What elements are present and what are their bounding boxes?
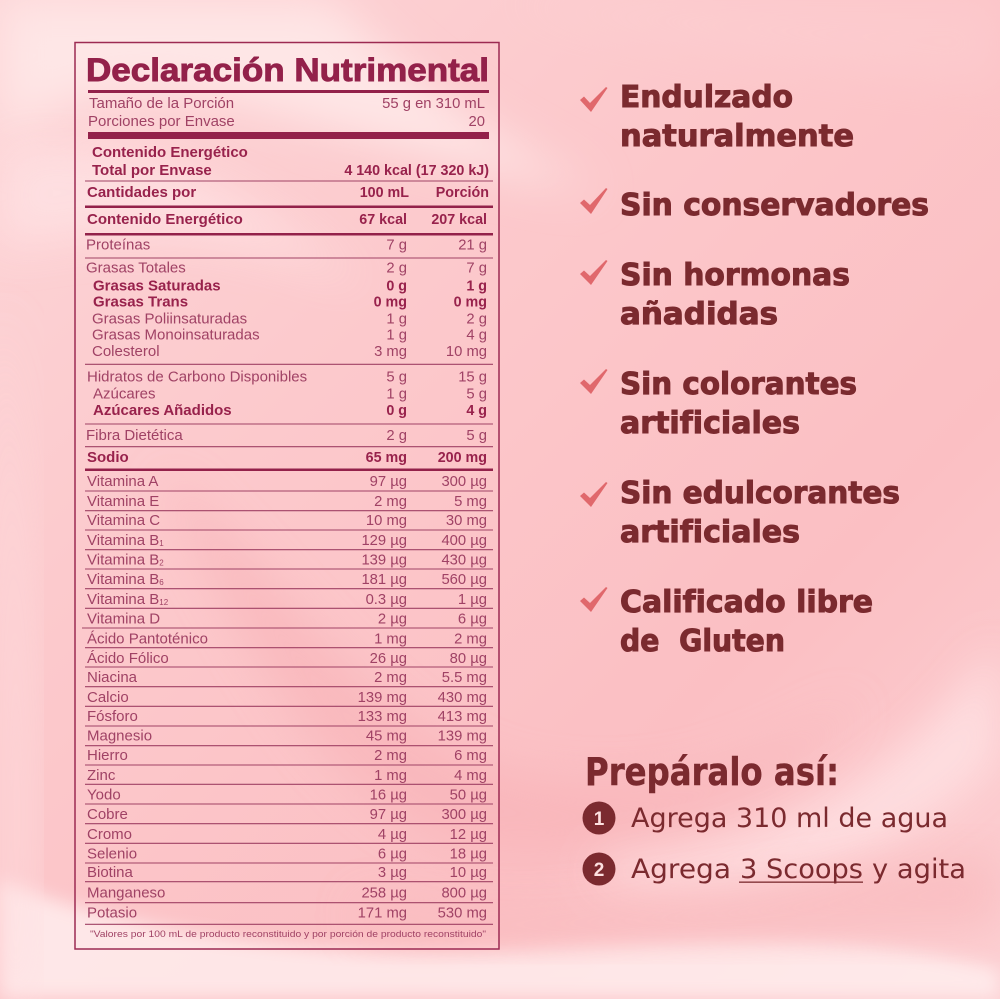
benefit: sin hormonas añadidas [580,258,850,332]
row: vitamina E: 5 mg [454,494,487,510]
header rule [88,90,489,93]
fats group [86,260,487,360]
row: ácido fólico: Ácido Fólico [87,650,169,667]
row: potasio [87,905,487,922]
energy row: 207 kcal [431,212,487,228]
benefit: sin edulcorantes artificiales: artificiales [620,515,800,550]
benefit: sin edulcorantes artificiales: Sin edulcorantes [620,476,900,511]
row: manganeso: Manganeso [87,884,165,901]
servings per container row: 20 [469,114,485,130]
row: yodo: 50 µg [450,788,487,804]
row: vitamina C: 10 mg [366,513,407,529]
row: colesterol [92,343,487,360]
row: hierro [87,747,487,764]
row: grasas poliinsaturadas: 2 g [466,311,487,327]
row: grasas trans [93,294,487,311]
icon: check [580,482,608,507]
row: niacina: 2 mg [374,670,407,686]
row: vitamina B1: 400 µg [441,533,487,549]
row: manganeso: 800 µg [441,885,487,901]
row: azúcares: Azúcares [93,385,156,402]
row: grasas monoinsaturadas [92,326,487,343]
vitamins and minerals list [82,473,493,922]
row: vitamina B6: 181 µg [361,572,407,588]
row: niacina [87,669,487,686]
preparation section [582,750,966,886]
benefit: endulzado naturalmente [580,80,854,154]
row: hidratos: Hidratos de Carbono Disponibles [87,369,307,386]
row: grasas totales: 2 g [386,261,407,277]
row: manganeso [87,884,487,901]
row: calcio: Calcio [87,689,129,706]
servings per container row: Porciones por Envase [88,113,235,130]
row: grasas monoinsaturadas: Grasas Monoinsaturadas [92,326,260,343]
row: yodo: Yodo [87,787,121,804]
row: sodio: 200 mg [438,450,487,466]
icon: number 2: 2 [594,860,604,881]
benefit: endulzado naturalmente: naturalmente [620,119,854,154]
energy row [87,211,487,228]
heading: preparation: Prepáralo así: [585,750,839,794]
icon: check [580,260,608,285]
row: potasio: 171 mg [358,906,407,922]
row: colesterol: Colesterol [92,343,160,360]
row: proteínas: 21 g [458,238,487,254]
row: hierro: 2 mg [374,748,407,764]
row: vitamina B12 [87,591,487,608]
row: zinc: 4 mg [454,768,487,784]
benefit: calificado libre de gluten: Calificado libre [620,585,873,620]
row: vitamina D: Vitamina D [87,610,160,627]
row: vitamina E: Vitamina E [87,493,159,510]
row: vitamina B12: Vitamina B [87,591,159,608]
icon: check [580,87,608,112]
row: ácido fólico: 80 µg [450,651,487,667]
row: fósforo: Fósforo [87,708,138,725]
row: selenio: Selenio [87,845,137,862]
row: hidratos [87,369,487,386]
row: cromo [87,826,487,843]
row: grasas monoinsaturadas: 4 g [466,327,487,343]
row: vitamina B6: 6 [159,578,164,587]
row: yodo: 16 µg [370,788,407,804]
row: cobre: 97 µg [370,807,407,823]
row: vitamina B6: Vitamina B [87,571,159,588]
row: grasas monoinsaturadas: 1 g [386,327,407,343]
icon: check [580,188,608,214]
row: grasas saturadas: Grasas Saturadas [93,278,221,295]
benefit: sin conservadores: Sin conservadores [620,188,929,223]
row: grasas saturadas: 0 g [386,279,407,295]
benefit: calificado libre de gluten [580,585,873,659]
row: ácido pantoténico [87,630,487,647]
step 2: 3 Scoops [740,854,863,885]
row: hidratos: 5 g [386,370,407,386]
row: vitamina B6 [87,571,487,588]
row: calcio [87,689,487,706]
benefit: endulzado naturalmente: Endulzado [620,80,793,115]
row: calcio: 430 mg [438,690,487,706]
column headers [87,184,489,201]
row: magnesio [87,728,487,745]
energy row: Contenido Energético [87,211,243,228]
row: vitamina B1: 129 µg [361,533,407,549]
row: magnesio: Magnesio [87,728,152,745]
row: grasas trans: 0 mg [374,295,407,311]
row: grasas trans: 0 mg [454,295,487,311]
benefit: sin hormonas añadidas: Sin hormonas [620,258,850,293]
serving size row [89,95,485,112]
row: fibra: 5 g [466,428,487,444]
row: hierro: 6 mg [454,748,487,764]
total energy block [92,144,489,179]
row: vitamina B6: 560 µg [441,572,487,588]
total energy block: 4 140 kcal (17 320 kJ) [344,163,489,179]
serving size row: 55 g en 310 mL [382,96,485,112]
benefit: sin colorantes artificiales [580,367,857,441]
row: vitamina B2: Vitamina B [87,552,159,569]
row: biotina: 10 µg [450,865,487,881]
row: vitamina C: Vitamina C [87,512,160,529]
row: cobre: Cobre [87,806,128,823]
row: vitamina D [87,610,487,627]
row: fósforo [87,708,487,725]
footnote: "Valores por 100 mL de producto reconstituido y por porción de producto reconstituido" [90,929,486,939]
row: vitamina B12: 1 µg [458,592,487,608]
row: vitamina B1: Vitamina B [87,532,159,549]
row: cromo: 12 µg [450,827,487,843]
row: manganeso: 258 µg [361,885,407,901]
row: cromo: Cromo [87,826,132,843]
benefit: sin colorantes artificiales: artificiales [620,406,800,441]
step 2 [582,852,966,886]
row: magnesio: 45 mg [366,729,407,745]
row: fibra [86,427,487,444]
column headers: Porción [436,185,489,201]
row: colesterol: 3 mg [374,344,407,360]
row: potasio: Potasio [87,905,137,922]
row: proteínas: 7 g [386,238,407,254]
step 1: Agrega 310 ml de agua [631,803,948,834]
row: colesterol: 10 mg [446,344,487,360]
row: grasas poliinsaturadas [92,310,487,327]
carbohydrates group [87,369,487,419]
row: vitamina A: 97 µg [370,474,407,490]
row: fibra: 2 g [386,428,407,444]
row: ácido pantoténico: 1 mg [374,631,407,647]
icon: number 1 [582,802,616,834]
row: zinc: Zinc [87,767,116,784]
row: grasas saturadas [93,278,487,295]
row: azúcares añadidos: 4 g [466,403,487,419]
row: ácido fólico [87,650,487,667]
benefit: sin hormonas añadidas: añadidas [620,297,778,332]
row: vitamina D: 2 µg [378,611,407,627]
row: vitamina B12: 0.3 µg [366,592,407,608]
row: vitamina B12: 12 [159,598,169,607]
icon: number 1: 1 [594,809,605,830]
row: azúcares: 1 g [386,386,407,402]
row: proteínas: Proteínas [86,236,150,254]
row: fósforo: 413 mg [438,709,487,725]
row: biotina [87,864,487,881]
row: vitamina B2: 430 µg [441,553,487,569]
benefit: sin edulcorantes artificiales [580,476,900,550]
row: selenio: 6 µg [378,846,407,862]
row: ácido pantoténico: Ácido Pantoténico [87,630,208,647]
row: vitamina D: 6 µg [458,611,487,627]
row: magnesio: 139 mg [438,729,487,745]
icon: check [580,587,608,612]
row: cromo: 4 µg [378,827,407,843]
row: ácido pantoténico: 2 mg [454,631,487,647]
row: biotina: 3 µg [378,865,407,881]
row: ácido fólico: 26 µg [370,651,407,667]
total energy block: Contenido Energético [92,144,248,161]
row: vitamina A: 300 µg [441,474,487,490]
row: grasas poliinsaturadas: Grasas Poliinsaturadas [92,310,247,327]
energy row: 67 kcal [359,212,407,228]
row: potasio: 530 mg [438,906,487,922]
row: grasas totales: Grasas Totales [86,260,186,277]
row: azúcares añadidos: 0 g [386,403,407,419]
row: grasas totales: 7 g [466,261,487,277]
row: fibra: Fibra Dietética [86,427,183,444]
row: sodio: Sodio [87,449,129,466]
row: azúcares: 5 g [466,386,487,402]
row: grasas trans: Grasas Trans [93,294,188,311]
icon: check [580,369,608,394]
row: vitamina B2: 2 [159,559,164,568]
row: zinc [87,767,487,784]
serving size row: Tamaño de la Porción [89,95,234,112]
row: cobre: 300 µg [441,807,487,823]
row: proteínas [86,236,487,254]
row: vitamina E [87,493,487,510]
row: yodo [87,787,487,804]
row: vitamina C: 30 mg [446,513,487,529]
row: fósforo: 133 mg [358,709,407,725]
row: vitamina A [87,473,487,490]
thick rule [88,132,489,139]
panel: nutrition table [75,42,499,949]
row: selenio [87,845,487,862]
row: niacina: 5.5 mg [442,670,487,686]
row: grasas poliinsaturadas: 1 g [386,311,407,327]
benefit: sin colorantes artificiales: Sin colorantes [620,367,857,402]
row: zinc: 1 mg [374,768,407,784]
step 2: y agita [872,854,966,885]
row: vitamina A: Vitamina A [87,473,158,490]
benefit: calificado libre de gluten: de Gluten [620,624,785,659]
row: niacina: Niacina [87,669,138,686]
row: vitamina C [87,512,487,529]
step 2: Agrega [631,854,731,885]
column headers: Cantidades por [87,184,196,201]
row: vitamina E: 2 mg [374,494,407,510]
row: grasas saturadas: 1 g [466,279,487,295]
row: vitamina B1: 1 [159,539,164,548]
row: selenio: 18 µg [450,846,487,862]
row: azúcares [93,385,487,402]
row: vitamina B2 [87,552,487,569]
row: hierro: Hierro [87,747,128,764]
row: biotina: Biotina [87,864,134,881]
row: sodio: 65 mg [366,450,407,466]
row: hidratos: 15 g [458,370,487,386]
total energy block: Total por Envase [92,162,212,179]
row: cobre [87,806,487,823]
row: azúcares añadidos: Azúcares Añadidos [93,402,232,419]
row: sodio [87,449,487,466]
row: vitamina B2: 139 µg [361,553,407,569]
row: grasas totales [86,260,487,277]
servings per container row [88,113,485,130]
icon: number 2 [582,852,616,886]
row: calcio: 139 mg [358,690,407,706]
column headers: 100 mL [360,185,409,201]
title: Declaración Nutrimental [86,52,489,88]
panel border [75,42,499,949]
benefits list [580,80,929,659]
row: azúcares añadidos [93,402,487,419]
row: vitamina B1 [87,532,487,549]
